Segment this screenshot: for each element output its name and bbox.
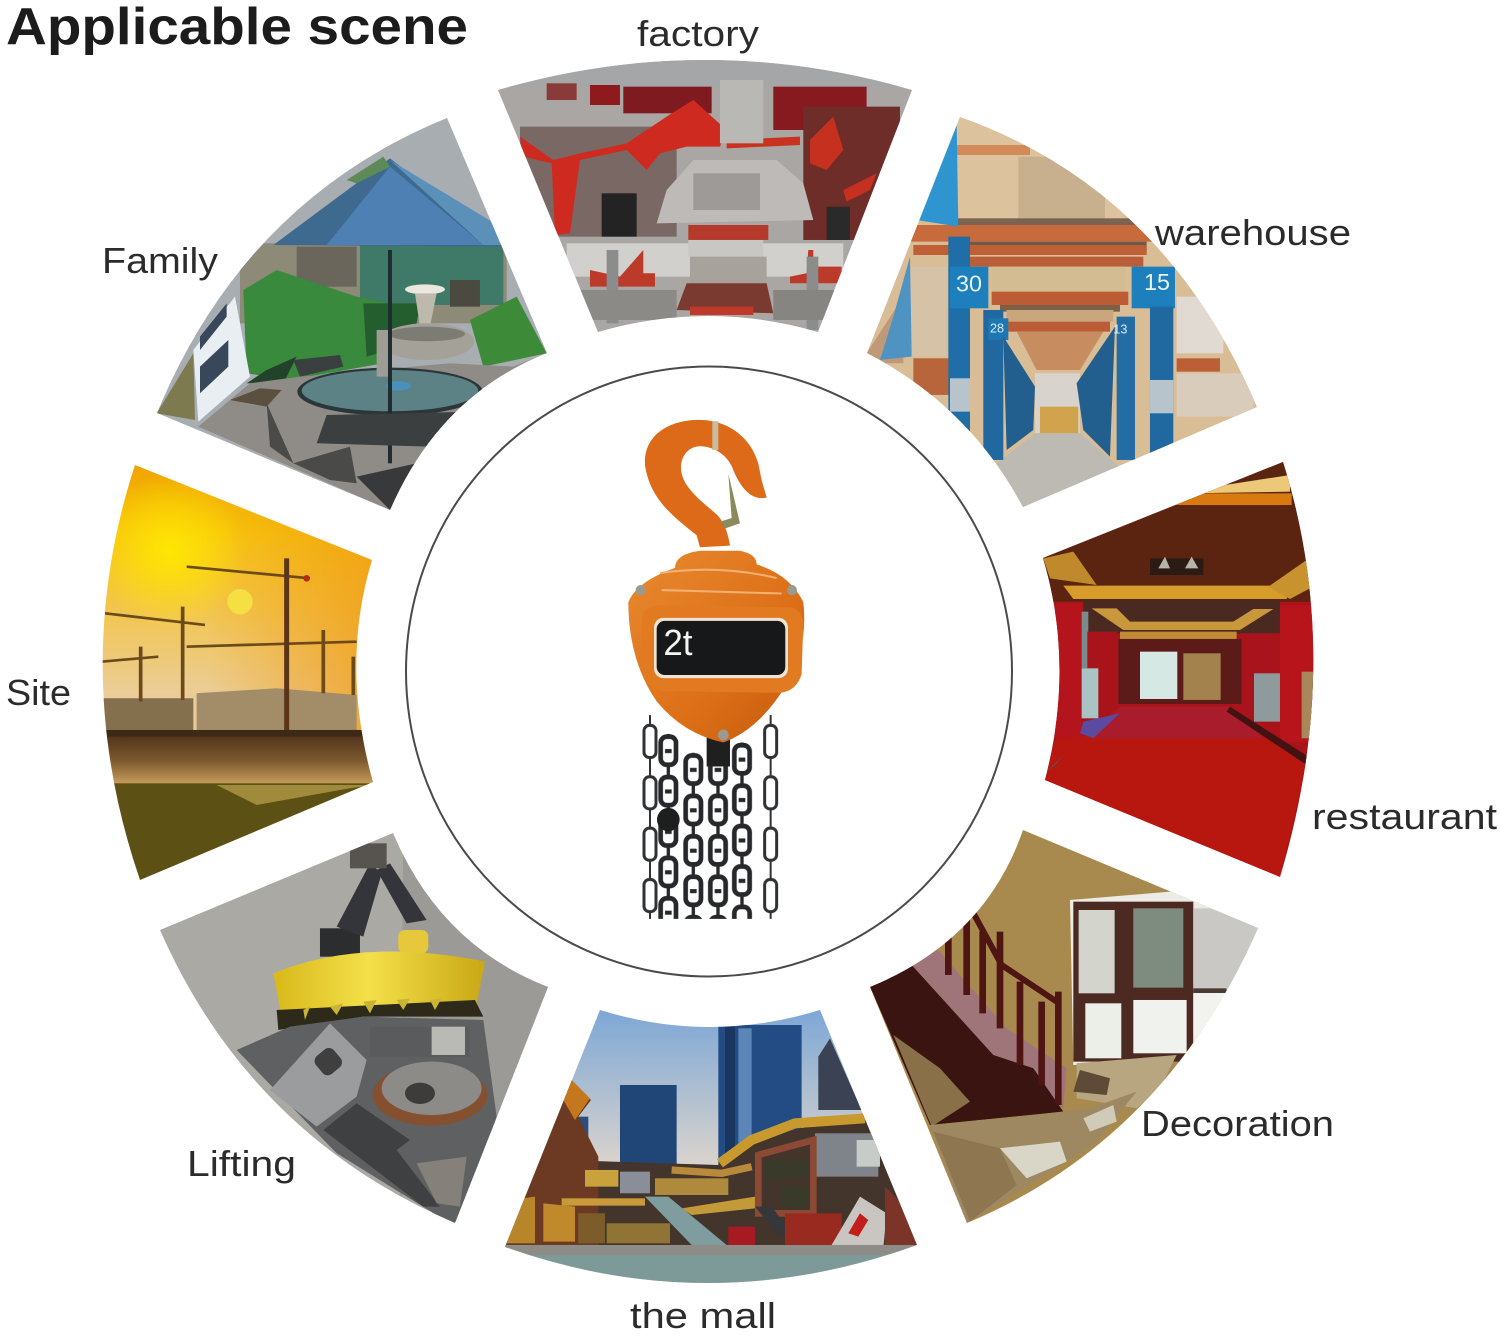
- hook: [645, 420, 767, 547]
- hoist body: [628, 551, 804, 742]
- hoist product: [628, 420, 804, 919]
- hook latch: [720, 474, 740, 528]
- label: Site: Site: [6, 672, 71, 713]
- aisle signs: 30: [956, 271, 982, 297]
- center ring: [406, 366, 1012, 976]
- label: Family: Family: [102, 240, 218, 281]
- panel: warehouse photo: [860, 110, 1270, 520]
- panel: factory photo: [498, 60, 912, 332]
- label: Lifting: Lifting: [187, 1143, 296, 1184]
- label: the mall: the mall: [630, 1295, 776, 1336]
- name plate: [654, 618, 788, 678]
- aisle signs: [956, 274, 1169, 334]
- panel: restaurant photo: [1043, 462, 1314, 877]
- chains: [640, 715, 781, 919]
- name plate: 2t: [663, 623, 693, 663]
- panel: site photo: [102, 465, 373, 880]
- aisle signs: 28: [990, 322, 1004, 336]
- label: factory: factory: [637, 13, 759, 54]
- bolts: [636, 585, 797, 740]
- aisle signs: 13: [1113, 322, 1127, 336]
- label: restaurant: restaurant: [1312, 796, 1497, 837]
- panel: decoration photo: [860, 825, 1270, 1235]
- hook collar: [712, 421, 718, 450]
- label: Decoration: Decoration: [1141, 1103, 1334, 1144]
- panel: lifting photo: [150, 830, 560, 1230]
- panel: the mall photo: [495, 1000, 925, 1290]
- aisle signs: 15: [1144, 269, 1170, 295]
- label: warehouse: warehouse: [1154, 212, 1351, 253]
- panel: family photo: [150, 110, 560, 520]
